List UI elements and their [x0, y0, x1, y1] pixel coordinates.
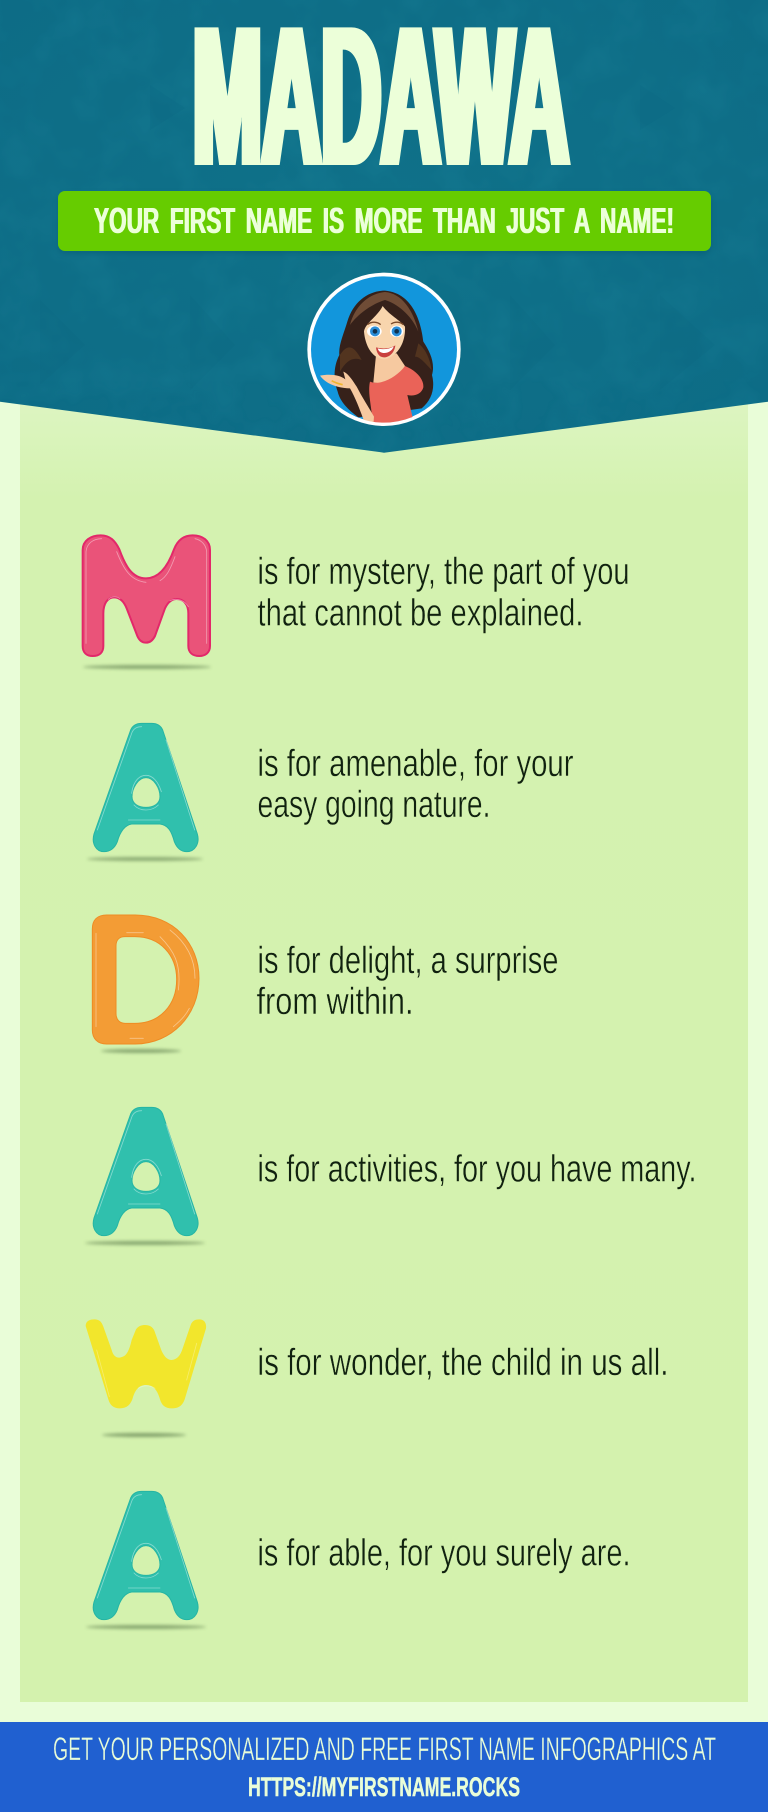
- panel: letters background: [20, 395, 748, 1702]
- subtitle banner: [58, 191, 711, 254]
- icon: letter A: [93, 1491, 198, 1620]
- letter A (second): [85, 1107, 205, 1245]
- text: M row: that cannot be explained.: [258, 592, 584, 634]
- shadow: M: [83, 665, 211, 669]
- icon: letter W: [86, 1319, 206, 1408]
- header band: [0, 0, 768, 453]
- letter A (third): [86, 1491, 206, 1629]
- shadow: D: [101, 1049, 181, 1053]
- text: M row: is for mystery, the part of you: [258, 551, 630, 593]
- text: M row: [258, 551, 630, 634]
- footer url: HTTPS://MYFIRSTNAME.ROCKS: [248, 1772, 520, 1802]
- icon: letter D: [92, 915, 199, 1044]
- text: A row: is for able, for you surely are.: [258, 1532, 630, 1574]
- icon: woman avatar: [307, 273, 461, 426]
- letter D: [92, 915, 199, 1053]
- letter A (first): [87, 723, 203, 861]
- icon: letter M: [83, 535, 210, 656]
- shadow: A: [87, 857, 203, 861]
- letter M: [83, 535, 211, 669]
- shadow: A: [86, 1625, 206, 1629]
- letter W: [86, 1319, 206, 1437]
- text: D row: from within.: [256, 981, 414, 1023]
- text: A row: easy going nature.: [258, 784, 490, 826]
- text: A row: [258, 743, 574, 826]
- shadow: W: [102, 1433, 186, 1437]
- text: A row: is for amenable, for your: [258, 743, 574, 785]
- footer: [0, 1722, 768, 1812]
- icon: letter A: [93, 1107, 198, 1236]
- icon: letter A: [93, 723, 198, 852]
- text: D row: is for delight, a surprise: [258, 940, 558, 982]
- shadow: A: [85, 1241, 205, 1245]
- text: D row: [256, 940, 558, 1023]
